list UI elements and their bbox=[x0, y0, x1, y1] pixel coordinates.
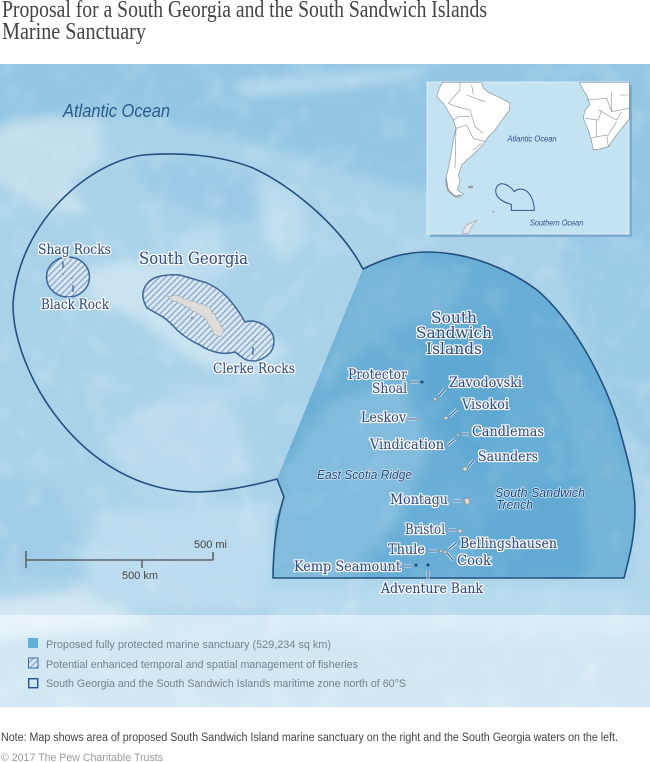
inset shadow bbox=[430, 85, 632, 237]
labels: South Sandwich islands bbox=[294, 367, 557, 597]
label: Atlantic Ocean: Atlantic Ocean bbox=[62, 101, 170, 121]
inset ocean bbox=[427, 82, 629, 234]
labels: South Sandwich islands: Protector bbox=[348, 367, 407, 383]
labels: South Sandwich islands: Shoal bbox=[372, 381, 407, 397]
inset: South America bbox=[437, 82, 510, 198]
islands and seamounts: South Sandwich chain bbox=[414, 380, 470, 566]
legend: hatched swatch bbox=[28, 658, 38, 668]
title bbox=[2, 0, 487, 45]
labels: South Sandwich islands: Leskov bbox=[361, 410, 406, 426]
scale bar bbox=[26, 539, 227, 582]
labels: South Sandwich islands: Candlemas bbox=[472, 424, 544, 440]
labels: undersea features: South Sandwich bbox=[495, 485, 585, 500]
hatched area: Shag Rocks and Black Rock bbox=[46, 257, 90, 297]
legend text: Proposed fully protected marine sanctuary (529,234 sq km) bbox=[46, 639, 331, 651]
labels: South Sandwich islands: Vindication bbox=[369, 437, 444, 453]
panel: proposed marine sanctuary fill bbox=[274, 252, 634, 578]
inset: Southern Ocean label: Southern Ocean bbox=[530, 218, 584, 227]
legend background bbox=[0, 615, 650, 707]
panel: South Georgia fisheries management zone bbox=[46, 257, 274, 361]
scale bar: 500 mi bbox=[194, 539, 227, 551]
scale bar: 500 km bbox=[122, 570, 158, 582]
labels: South Georgia group: Shag Rocks bbox=[38, 242, 111, 258]
label: South Sandwich Islands: Islands bbox=[426, 339, 482, 358]
inset: Antarctic Peninsula and islands bbox=[462, 220, 477, 233]
inset: Atlantic Ocean label: Atlantic Ocean bbox=[506, 134, 557, 143]
legend: maritime zone swatch bbox=[29, 679, 38, 688]
panel: inset locator map bbox=[427, 82, 632, 237]
labels: South Sandwich islands: Montagu bbox=[390, 492, 448, 508]
title: Marine Sanctuary bbox=[2, 19, 146, 45]
label: South Sandwich Islands: Sandwich bbox=[416, 323, 492, 342]
inset: South America borders bbox=[448, 82, 485, 168]
panel: legend bbox=[0, 615, 650, 707]
hatched area: South Georgia and Clerke Rocks bbox=[143, 275, 274, 361]
labels: South Georgia group: Clerke Rocks bbox=[213, 361, 295, 377]
maritime zone boundary bbox=[13, 154, 635, 578]
island: South Georgia bbox=[167, 295, 224, 337]
labels: South Georgia group: South Georgia bbox=[139, 249, 248, 269]
leader lines: South Sandwich chain bbox=[404, 382, 474, 579]
legend: sanctuary swatch bbox=[28, 638, 38, 648]
legend text bbox=[46, 639, 406, 690]
labels: undersea features: East Scotia Ridge bbox=[317, 467, 412, 482]
labels: South Georgia group bbox=[38, 242, 295, 377]
labels: South Sandwich islands: Bristol bbox=[405, 522, 445, 538]
legend text: South Georgia and the South Sandwich Islands maritime zone north of 60°S bbox=[46, 678, 406, 690]
labels: South Georgia group: Black Rock bbox=[41, 297, 110, 313]
note: Note: Map shows area of proposed South Sandwich Island marine sanctuary on the right and the South Georgia waters on the left. bbox=[1, 732, 618, 744]
inset: Africa bbox=[579, 82, 629, 150]
labels: undersea features: Trench bbox=[496, 497, 533, 512]
labels: South Sandwich islands: Kemp Seamount bbox=[294, 559, 402, 575]
inset: zone outline bbox=[496, 184, 534, 210]
labels: South Sandwich islands: Thule bbox=[388, 542, 425, 558]
labels: South Sandwich islands: Visokoi bbox=[461, 397, 510, 413]
labels: South Sandwich islands: Saunders bbox=[478, 449, 538, 465]
labels: undersea features bbox=[317, 467, 585, 512]
labels: South Sandwich islands: Bellingshausen bbox=[460, 536, 557, 552]
label: South Sandwich Islands bbox=[416, 308, 492, 358]
labels: South Sandwich islands: Zavodovski bbox=[449, 375, 523, 391]
label: South Sandwich Islands: South bbox=[431, 308, 477, 327]
legend text: Potential enhanced temporal and spatial management of fisheries bbox=[46, 659, 358, 671]
inset: Africa borders bbox=[585, 92, 629, 147]
rocks and leader lines bbox=[62, 262, 257, 355]
labels: South Sandwich islands: Cook bbox=[457, 553, 492, 569]
labels: South Sandwich islands: Adventure Bank bbox=[380, 581, 484, 597]
